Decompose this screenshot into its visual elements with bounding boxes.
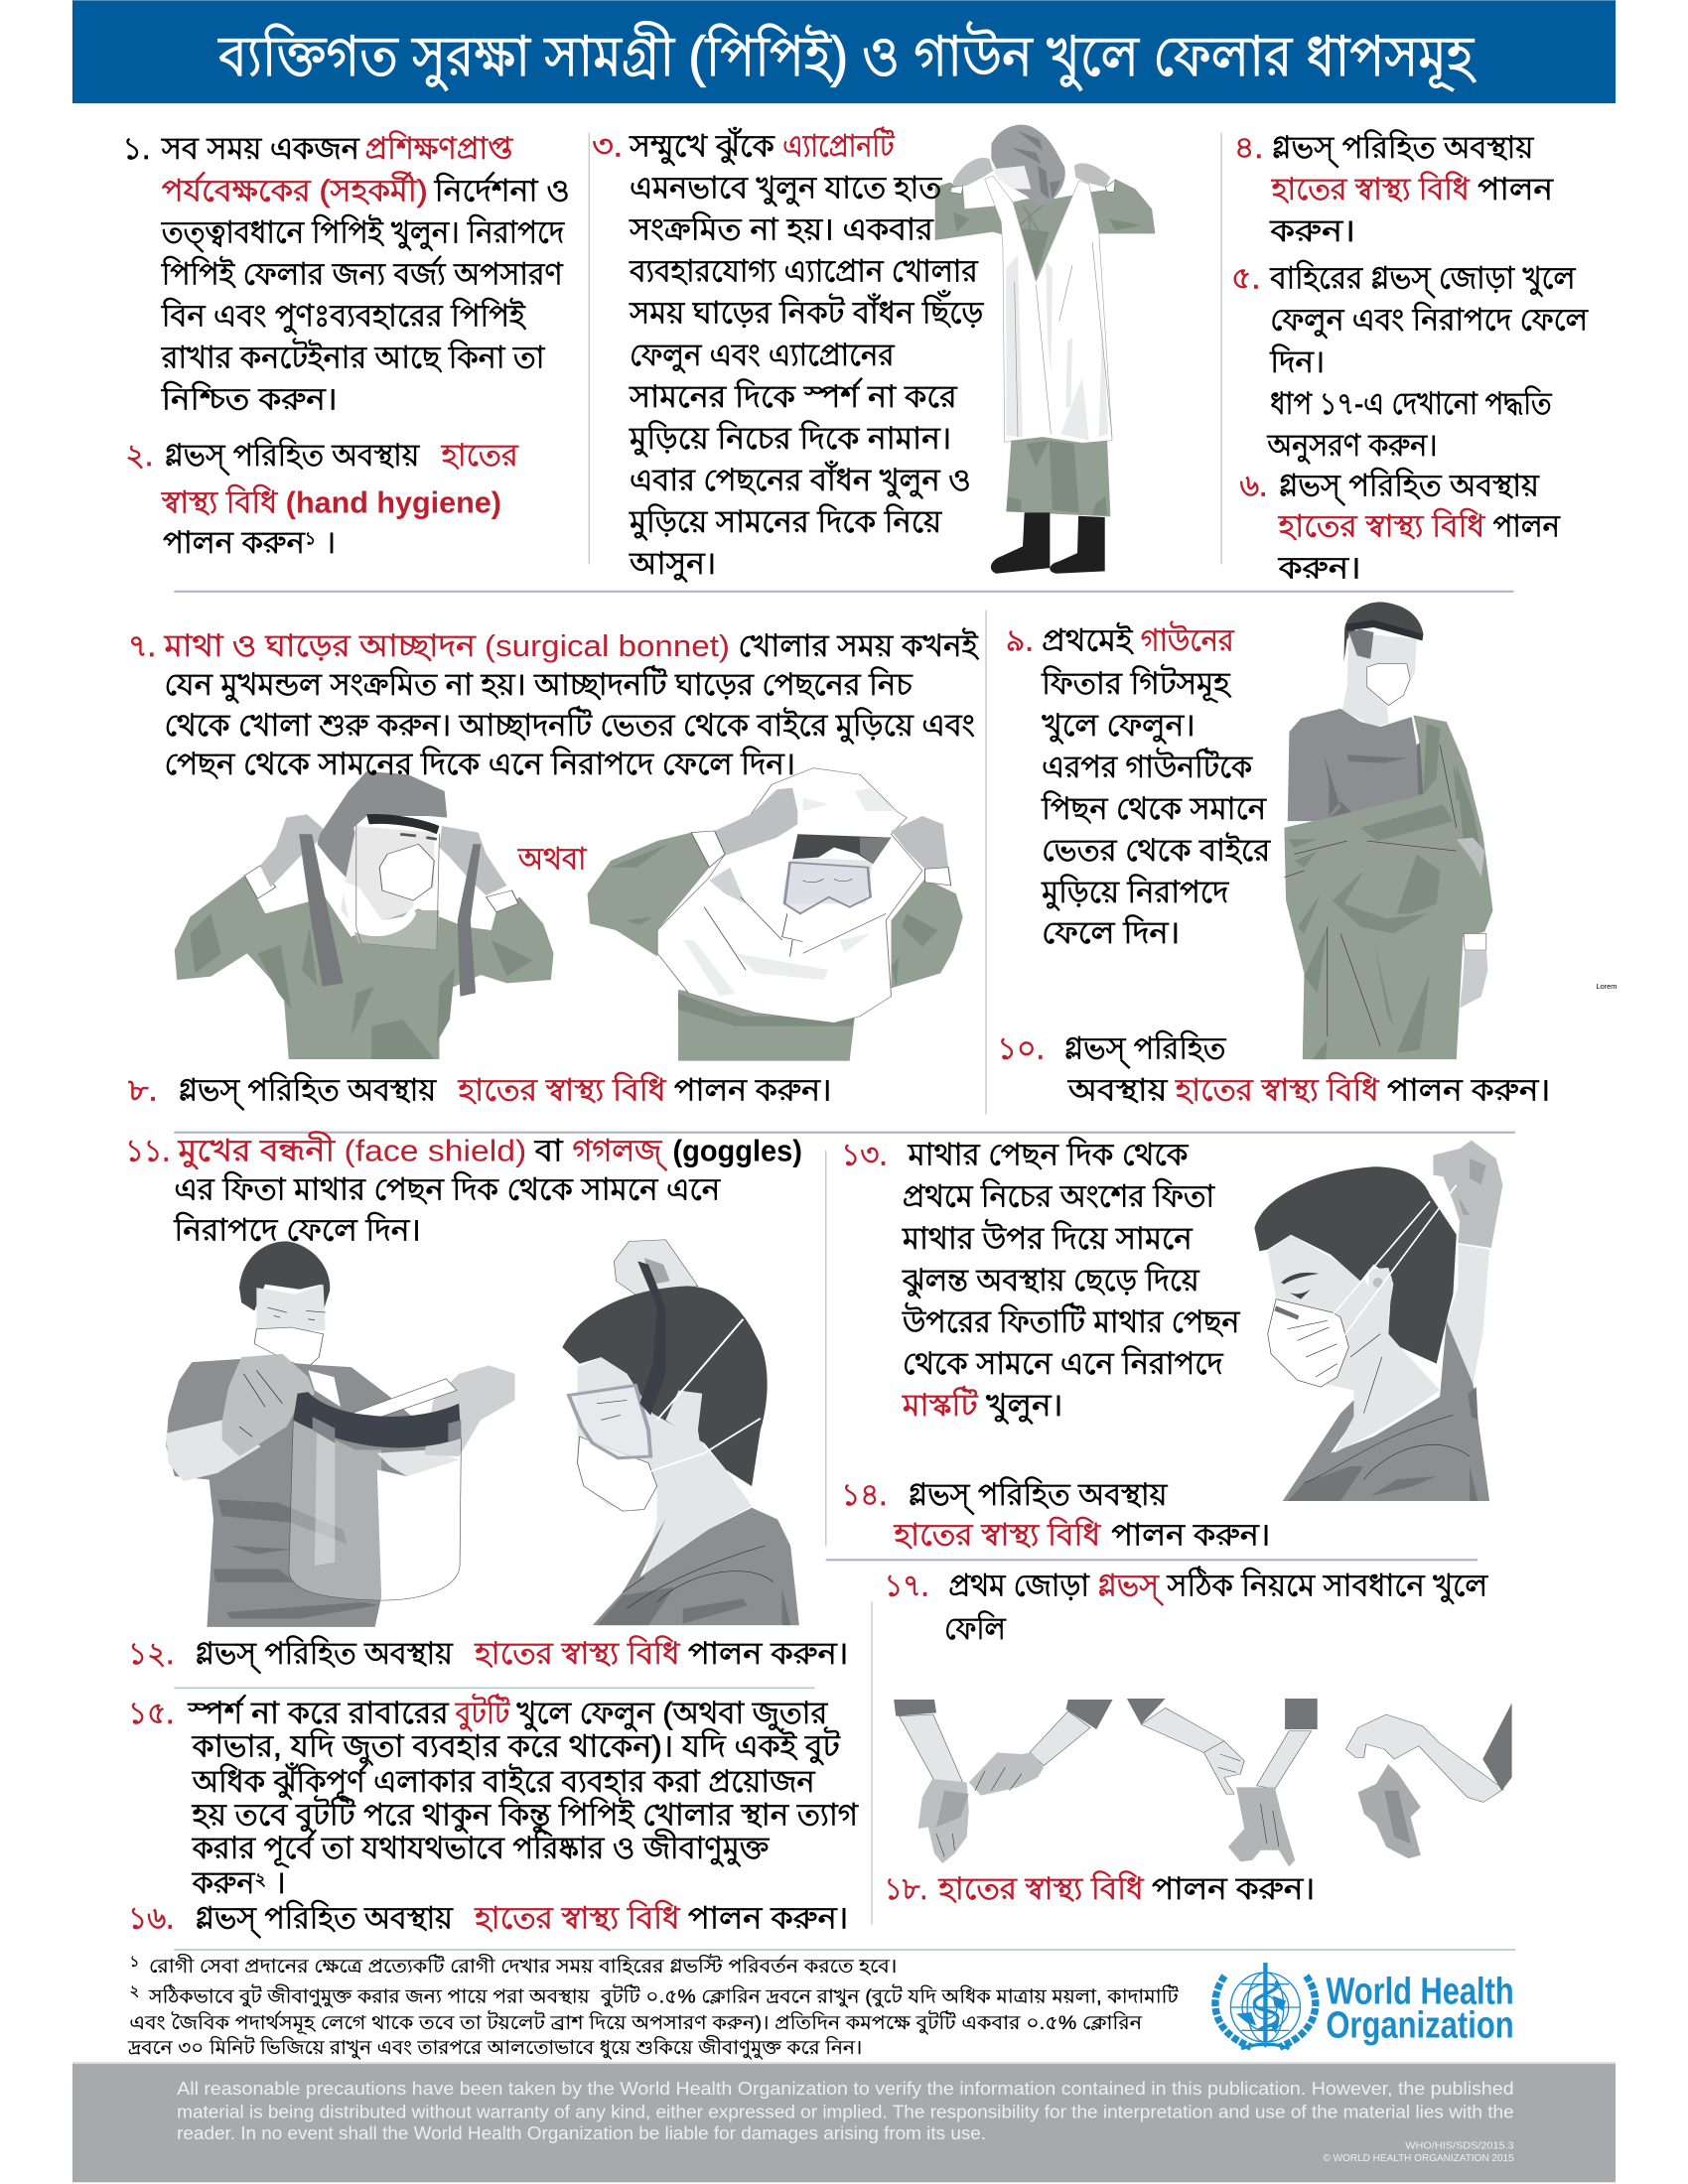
steps 1 and 2: ২. — [125, 438, 153, 473]
steps 4, 5 and 6: অনুসরণ করুন। — [1266, 428, 1438, 464]
step 9 and 10 text: পালন করুন। — [1387, 1072, 1550, 1107]
steps 15 and 16 text: । — [266, 1865, 286, 1900]
steps 1 and 2: । — [317, 525, 336, 560]
title banner — [72, 0, 1616, 103]
step 17 text: ১৭. — [885, 1569, 929, 1603]
steps 4, 5 and 6: গ্লভস্ পরিহিত অবস্থায় — [1279, 468, 1540, 506]
step 17 text: প্রথম জোড়া — [948, 1569, 1090, 1603]
step 3: মুড়িয়ে নিচের দিকে নামান। — [629, 420, 951, 457]
illustration: removing face shield — [166, 1241, 515, 1627]
steps 4, 5 and 6: পালন — [1477, 172, 1554, 206]
steps 1 and 2: তত্ত্বাবধানে পিপিই খুলুন। নিরাপদে — [161, 213, 565, 252]
step 3: এমনভাবে খুলুন যাতে হাত — [630, 171, 942, 205]
step 18 text — [885, 1870, 1315, 1906]
steps 1 and 2: ১ — [305, 528, 317, 549]
illustration: removing apron — [935, 125, 1155, 574]
steps 11 and 12 text: গ্লভস্ পরিহিত অবস্থায় — [195, 1635, 454, 1674]
steps 4, 5 and 6: বাহিরের গ্লভস্ জোড়া খুলে — [1269, 260, 1576, 299]
steps 7 and 8 text: হাতের স্বাস্থ্য বিধি — [457, 1071, 666, 1107]
footnotes — [127, 1954, 1180, 2060]
step 9 and 10 text: ফেলে দিন। — [1042, 914, 1180, 950]
steps 7 and 8 text: পেছন থেকে সামনের দিকে এনে নিরাপদে ফেলে দিন। — [165, 746, 795, 781]
steps 13 and 14 text — [841, 1137, 1270, 1553]
step 3: এবার পেছনের বাঁধন খুলুন ও — [630, 461, 971, 498]
steps 11 and 12 text: নিরাপদে ফেলে দিন। — [173, 1211, 421, 1247]
steps 15 and 16 text — [128, 1694, 859, 1938]
steps 1 and 2: বিন এবং পুণঃব্যবহারের পিপিই — [161, 298, 527, 335]
steps 7 and 8 text: গ্লভস্ পরিহিত অবস্থায় — [179, 1071, 437, 1110]
steps 1 and 2: গ্লভস্ পরিহিত অবস্থায় — [165, 437, 420, 476]
step 9 and 10 text: খুলে ফেলুন। — [1042, 708, 1195, 744]
steps 11 and 12 text: ১২. — [128, 1636, 174, 1671]
step 3: আসুন। — [629, 546, 716, 582]
step 17 text — [885, 1567, 1488, 1646]
steps 15 and 16 text: করুন — [193, 1865, 255, 1900]
disclaimer bar: © WORLD HEALTH ORGANIZATION 2015 — [1324, 2153, 1514, 2164]
steps 4, 5 and 6: ধাপ ১৭-এ দেখানো পদ্ধতি — [1270, 385, 1552, 421]
steps 7 and 8 text: মাথা ও ঘাড়ের আচ্ছাদন (surgical bonnet) — [163, 628, 730, 663]
steps 4, 5 and 6: করুন। — [1269, 213, 1355, 248]
steps 15 and 16 text: করার পূর্বে তা যথাযথভাবে পরিষ্কার ও জীবাণুমুক্ত — [192, 1829, 770, 1867]
steps 1 and 2: নির্দেশনা ও — [434, 172, 570, 207]
steps 1 and 2: পিপিই ফেলার জন্য বর্জ্য অপসারণ — [161, 255, 564, 291]
step 9 and 10 text — [997, 620, 1550, 1107]
stray label: Lorem — [1596, 984, 1618, 991]
steps 7 and 8 text: ৭. — [128, 628, 156, 663]
step 9 and 10 text: মুড়িয়ে নিরাপদে — [1041, 874, 1229, 910]
steps 15 and 16 text: হয় তবে বুটটি পরে থাকুন কিন্তু পিপিই খোলার স্থান ত্যাগ — [192, 1795, 859, 1835]
steps 11 and 12 text — [125, 1131, 848, 1674]
step 9 and 10 text: গাউনের — [1141, 620, 1235, 657]
logo: World Health Organization: Organization — [1326, 2004, 1514, 2046]
steps 11 and 12 text: হাতের স্বাস্থ্য বিধি — [474, 1635, 680, 1671]
steps 15 and 16 text: পালন করুন। — [688, 1900, 848, 1935]
steps 15 and 16 text: কাভার, যদি জুতা ব্যবহার করে থাকেন)। যদি একই বুট — [192, 1727, 841, 1765]
logo: World Health Organization: World Health — [1326, 1972, 1514, 2013]
steps 15 and 16 text: অধিক ঝুঁকিপূর্ণ এলাকার বাইরে ব্যবহার করা প্রয়োজন — [192, 1763, 815, 1801]
steps 4, 5 and 6: ফেলুন এবং নিরাপদে ফেলে — [1270, 302, 1589, 339]
footnotes: ১ — [129, 1954, 139, 1971]
step 9 and 10 text: ফিতার গিটসমূহ — [1041, 664, 1231, 703]
steps 15 and 16 text: ২ — [254, 1868, 266, 1889]
illustration: removing gown — [1284, 602, 1492, 1059]
step 3: মুড়িয়ে সামনের দিকে নিয়ে — [629, 503, 942, 540]
steps 4, 5 and 6: ৫. — [1231, 261, 1260, 296]
steps 11 and 12 text: গগলজ্ — [572, 1133, 668, 1170]
steps 11 and 12 text: মুখের বন্ধনী (face shield) — [177, 1131, 526, 1168]
title banner: ব্যক্তিগত সুরক্ষা সামগ্রী (পিপিই) ও গাউন খুলে ফেলার ধাপসমূহ — [217, 22, 1476, 91]
steps 4, 5 and 6 — [1231, 129, 1589, 585]
steps 1 and 2: পর্যবেক্ষকের (সহকর্মী) — [162, 171, 428, 207]
step 9 and 10 text: প্রথমেই — [1042, 622, 1134, 657]
steps 7 and 8 text: খোলার সময় কখনই — [738, 628, 980, 663]
steps 1 and 2 — [122, 130, 570, 560]
step 3: সম্মুখে ঝুঁকে — [629, 127, 775, 165]
footnotes: দ্রবনে ৩০ মিনিট ভিজিয়ে রাখুন এবং তারপরে আলতোভাবে ধুয়ে শুকিয়ে জীবাণুমুক্ত করে নিন। — [127, 2035, 862, 2060]
steps 13 and 14 text: উপরের ফিতাটি মাথার পেছন — [902, 1302, 1240, 1339]
steps 4, 5 and 6: করুন। — [1278, 550, 1360, 585]
illustration: removing mask — [1254, 1141, 1502, 1501]
illustration: removing goggles — [562, 1240, 799, 1625]
steps 15 and 16 text: স্পর্শ না করে রাবারের — [187, 1695, 450, 1730]
step 3: ফেলুন এবং এ্যাপ্রোনের — [630, 338, 895, 373]
step 9 and 10 text: হাতের স্বাস্থ্য বিধি — [1175, 1071, 1379, 1107]
step 9 and 10 text: অবস্থায় — [1067, 1072, 1168, 1107]
steps 11 and 12 text: ১১. — [125, 1133, 170, 1167]
steps 7 and 8 text: যেন মুখমন্ডল সংক্রমিত না হয়। আচ্ছাদনটি ঘাড়ের পেছনের নিচ — [165, 665, 914, 703]
step 3: এ্যাপ্রোনটি — [782, 126, 896, 163]
steps 4, 5 and 6: ৬. — [1239, 469, 1267, 503]
step 3: ৩. — [592, 128, 623, 163]
steps 13 and 14 text: থেকে সামনে এনে নিরাপদে — [903, 1345, 1223, 1381]
step 17 text: ফেলি — [944, 1610, 1007, 1646]
steps 13 and 14 text: ১৩. — [841, 1138, 887, 1172]
disclaimer bar — [72, 2062, 1616, 2182]
step 3 — [592, 126, 984, 582]
step 9 and 10 text: ভেতর থেকে বাইরে — [1042, 833, 1271, 868]
steps 13 and 14 text: মাথার পেছন দিক থেকে — [908, 1137, 1190, 1172]
steps 13 and 14 text: ঝুলন্ত অবস্থায় ছেড়ে দিয়ে — [902, 1262, 1199, 1298]
steps 7 and 8 text: পালন করুন। — [674, 1072, 831, 1107]
step 9 and 10 text: গ্লভস্ পরিহিত — [1064, 1029, 1226, 1068]
illustration: removing gloves — [894, 1699, 1512, 1866]
footnotes: ২ — [129, 1982, 139, 1999]
steps 4, 5 and 6: দিন। — [1269, 343, 1325, 379]
steps 1 and 2: প্রশিক্ষণপ্রাপ্ত — [364, 130, 513, 166]
steps 4, 5 and 6: হাতের স্বাস্থ্য বিধি — [1271, 171, 1470, 206]
steps 1 and 2: রাখার কনটেইনার আছে কিনা তা — [161, 339, 545, 375]
steps 4, 5 and 6: গ্লভস্ পরিহিত অবস্থায় — [1272, 129, 1534, 168]
steps 7 and 8 text: ৮. — [128, 1072, 157, 1107]
steps 13 and 14 text: খুলুন। — [986, 1388, 1062, 1424]
steps 15 and 16 text: বুটটি — [455, 1694, 510, 1731]
disclaimer bar: WHO/HIS/SDS/2015.3 — [1405, 2141, 1514, 2152]
step 9 and 10 text: ৯. — [1006, 622, 1034, 657]
step 9 and 10 text: পিছন থেকে সমানে — [1041, 790, 1267, 826]
panel dividers — [174, 133, 1515, 1950]
step 3: সংক্রমিত না হয়। একবার — [629, 211, 934, 247]
steps 4, 5 and 6: ৪. — [1234, 130, 1263, 165]
illustration: removing bonnet with goggles — [588, 768, 963, 1061]
steps 7 and 8 text: অথবা — [517, 842, 587, 877]
steps 1 and 2: নিশ্চিত করুন। — [161, 381, 337, 417]
steps 15 and 16 text: হাতের স্বাস্থ্য বিধি — [474, 1899, 680, 1935]
steps 4, 5 and 6: পালন — [1493, 508, 1561, 543]
steps 1 and 2: ১. — [122, 131, 150, 166]
logo: World Health Organization — [1215, 1963, 1514, 2049]
step 3: সময় ঘাড়ের নিকট বাঁধন ছিঁড়ে — [629, 290, 984, 331]
steps 11 and 12 text: বা — [534, 1133, 564, 1167]
steps 7 and 8 text: থেকে খোলা শুরু করুন। আচ্ছাদনটি ভেতর থেকে বাইরে মুড়িয়ে এবং — [165, 706, 975, 744]
step 9 and 10 text: ১০. — [997, 1030, 1045, 1065]
steps 1 and 2: স্বাস্থ্য বিধি (hand hygiene) — [161, 484, 501, 520]
step 3: ব্যবহারযোগ্য এ্যাপ্রোন খোলার — [629, 254, 979, 289]
steps 15 and 16 text: খুলে ফেলুন (অথবা জুতার — [516, 1696, 828, 1731]
footnotes: এবং জৈবিক পদার্থসমূহ লেগে থাকে তবে তা টয়লেট ব্রাশ দিয়ে অপসারণ করুন)। প্রতিদিন কমপক্ষে বুটটি একবার ০.৫% ক্লোরিন — [129, 2010, 1144, 2034]
footnotes: সঠিকভাবে বুট জীবাণুমুক্ত করার জন্য পায়ে পরা অবস্থায় বুটটি ০.৫% ক্লোরিন দ্রবনে রাখুন (বুটে যদি অধিক মাত্রায় ময়লা, কাদামাটি — [148, 1983, 1180, 2008]
steps 13 and 14 text: হাতের স্বাস্থ্য বিধি — [893, 1517, 1101, 1553]
step 3: সামনের দিকে স্পর্শ না করে — [629, 378, 958, 414]
steps 11 and 12 text: (goggles) — [672, 1133, 802, 1167]
step 17 text: গ্লভস্ — [1097, 1569, 1164, 1606]
steps 4, 5 and 6: হাতের স্বাস্থ্য বিধি — [1278, 507, 1485, 543]
steps 13 and 14 text: মাস্কটি — [902, 1386, 979, 1423]
steps 13 and 14 text: প্রথমে নিচের অংশের ফিতা — [903, 1178, 1215, 1214]
step 18 text: ১৮. — [885, 1871, 927, 1906]
step 17 text: সঠিক নিয়মে সাবধানে খুলে — [1166, 1567, 1488, 1604]
disclaimer bar: All reasonable precautions have been taken by the World Health Organization to verify the information contained in this publication. However, the published — [177, 2078, 1514, 2099]
disclaimer bar: material is being distributed without warranty of any kind, either expressed or implied. The responsibility for the interpretation and use of the material lies with the — [177, 2102, 1514, 2122]
steps 15 and 16 text: গ্লভস্ পরিহিত অবস্থায় — [195, 1899, 454, 1938]
illustration: removing bonnet with shield — [175, 771, 554, 1059]
steps 11 and 12 text: এর ফিতা মাথার পেছন দিক থেকে সামনে এনে — [174, 1171, 721, 1207]
step 9 and 10 text: এরপর গাউনটিকে — [1042, 748, 1253, 784]
steps 13 and 14 text: গ্লভস্ পরিহিত অবস্থায় — [909, 1476, 1168, 1515]
step 18 text: পালন করুন। — [1152, 1871, 1315, 1906]
steps 13 and 14 text: ১৪. — [841, 1477, 887, 1512]
steps 1 and 2: সব সময় একজন — [161, 131, 359, 166]
footnotes: রোগী সেবা প্রদানের ক্ষেত্রে প্রত্যেকটি রোগী দেখার সময় বাহিরের গ্লভস্টি পরিবর্তন করতে হবে। — [149, 1954, 897, 1978]
steps 1 and 2: পালন করুন — [163, 525, 306, 560]
steps 1 and 2: হাতের — [441, 438, 519, 473]
steps 15 and 16 text: ১৫. — [128, 1696, 174, 1730]
steps 11 and 12 text: পালন করুন। — [688, 1636, 848, 1671]
step 18 text: হাতের স্বাস্থ্য বিধি — [937, 1870, 1144, 1906]
disclaimer bar: reader. In no event shall the World Health Organization be liable for damages arising from its use. — [177, 2122, 986, 2143]
steps 13 and 14 text: পালন করুন। — [1111, 1518, 1270, 1553]
steps 13 and 14 text: মাথার উপর দিয়ে সামনে — [902, 1219, 1193, 1256]
steps 7 and 8 text — [128, 628, 980, 1110]
steps 15 and 16 text: ১৬. — [128, 1900, 174, 1935]
